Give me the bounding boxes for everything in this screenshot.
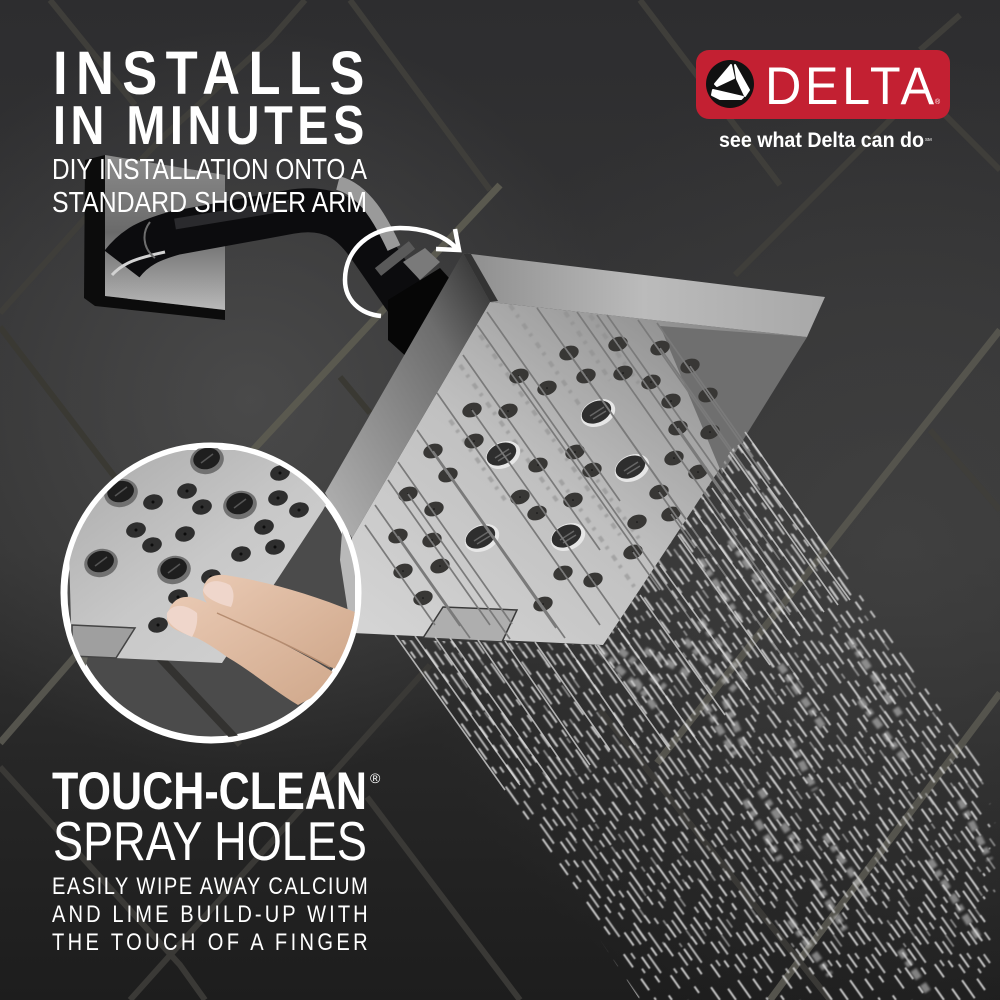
touch-clean description: THE TOUCH OF A FINGER — [52, 928, 368, 955]
water film on face — [450, 305, 640, 595]
heading: touch-clean spray holes: TOUCH-CLEAN — [52, 762, 367, 821]
callout circle: touch-clean detail — [64, 442, 358, 740]
install description: DIY INSTALLATION ONTO A — [52, 154, 367, 186]
fingers — [167, 575, 355, 705]
detail spray holes — [81, 442, 311, 635]
delta logo: see what Delta can do — [719, 129, 924, 152]
spray holes — [386, 334, 722, 614]
delta logo: SM — [925, 137, 932, 142]
touch-clean description: EASILY WIPE AWAY CALCIUM — [52, 872, 368, 899]
dark reflection on face — [660, 326, 807, 474]
heading: installs in minutes: IN MINUTES — [53, 95, 364, 156]
droplet clusters — [600, 540, 990, 995]
touch-clean description — [52, 872, 368, 955]
heading: installs in minutes — [52, 39, 367, 219]
heading: installs in minutes: INSTALLS — [53, 39, 364, 108]
delta logo: DELTA — [765, 56, 935, 115]
install description — [52, 154, 367, 219]
rotation arrow — [345, 228, 459, 316]
touch-clean description: AND LIME BUILD-UP WITH — [52, 900, 368, 927]
faceplate slot — [423, 607, 517, 642]
heading: touch-clean spray holes: SPRAY HOLES — [53, 810, 367, 872]
delta logo — [696, 50, 950, 152]
wall mount plate — [84, 155, 460, 360]
top bevel — [463, 253, 825, 337]
shower head — [325, 253, 825, 645]
heading: touch-clean spray holes: ® — [370, 770, 381, 786]
install description: STANDARD SHOWER ARM — [52, 187, 367, 219]
delta logo: ® — [935, 98, 941, 106]
left bevel — [325, 253, 490, 538]
heading: touch-clean spray holes — [52, 762, 381, 955]
shower arm — [112, 183, 460, 360]
logo mark — [706, 60, 754, 108]
water spray — [364, 308, 996, 1000]
